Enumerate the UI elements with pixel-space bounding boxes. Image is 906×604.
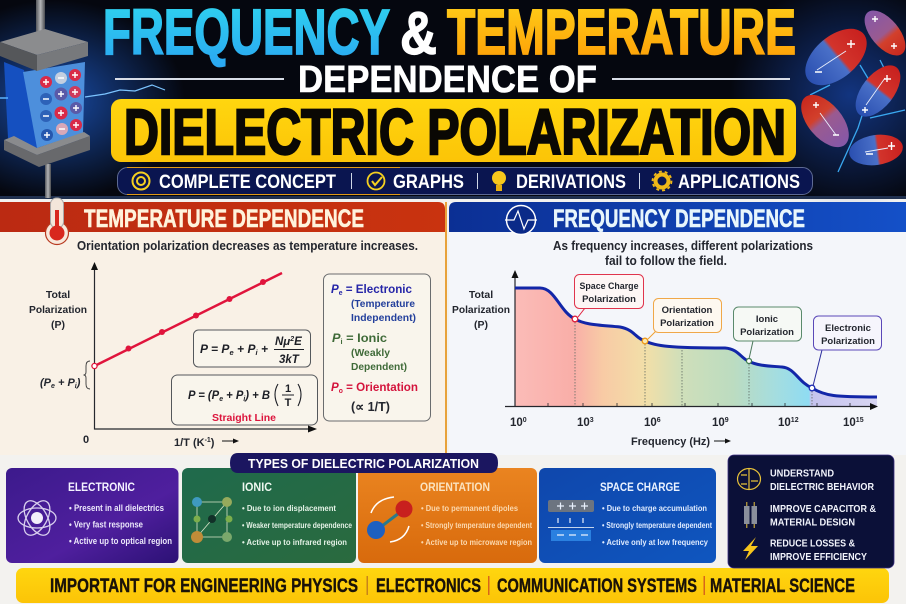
formula box: straight line form: 1	[285, 383, 291, 395]
chart: polarization versus 1/T: Total	[46, 289, 70, 301]
card: space charge: • Strongly temperature dependent	[602, 520, 712, 530]
card: electronic	[6, 468, 178, 563]
subtitle: dependence of: DEPENDENCE OF	[298, 59, 597, 101]
footer banner: COMMUNICATION SYSTEMS	[497, 575, 697, 597]
icon: capacitors	[744, 502, 757, 528]
chart: polarization versus frequency: Frequency (Hz)	[631, 436, 710, 448]
card: electronic: • Active up to optical region	[69, 536, 172, 546]
chart: polarization versus frequency: 10	[712, 417, 725, 429]
formula box: straight line form: P = (P	[188, 390, 220, 402]
footer banner: ELECTRONICS	[376, 575, 481, 597]
icon: lightning bolt	[743, 537, 758, 560]
callout: space charge polarization: Space Charge	[580, 281, 638, 292]
legend box: polarization terms: = Electronic	[343, 282, 412, 296]
feature navigation strip	[118, 168, 812, 194]
legend box: polarization terms: o	[339, 388, 343, 395]
chart: polarization versus frequency: (P)	[474, 319, 488, 331]
callout: space charge polarization: Polarization	[582, 294, 636, 305]
icon: thermometer	[46, 198, 68, 244]
icon: ionic lattice	[191, 497, 232, 543]
chart: polarization versus 1/T: i	[75, 383, 78, 390]
chart: polarization versus 1/T: 0	[83, 434, 89, 446]
formula box: orientation term: i	[255, 348, 258, 357]
panel: frequency dependence	[449, 202, 906, 455]
legend box: polarization terms: P	[331, 282, 340, 296]
chart: polarization versus frequency: 10	[778, 417, 791, 429]
card: space charge: • Active only at low frequency	[602, 537, 708, 547]
chart: polarization versus 1/T: e	[51, 383, 55, 390]
heading: types of dielectric polarization	[230, 453, 498, 473]
legend box: polarization terms: = Ionic	[343, 331, 387, 345]
card: ionic: IONIC	[242, 480, 272, 494]
callout: electronic polarization: Polarization	[821, 336, 875, 347]
formula box: straight line form: e	[219, 396, 223, 403]
chart: polarization versus 1/T: Polarization	[29, 304, 87, 316]
chart: polarization versus frequency	[452, 270, 878, 448]
callout: ionic polarization	[734, 307, 802, 359]
callout: orientation polarization: Orientation	[662, 305, 713, 316]
formula box: straight line form	[172, 375, 318, 425]
frequency panel description: As frequency increases, different polarizations	[553, 239, 813, 253]
card: orientation: • Strongly temperature dependent	[421, 520, 532, 530]
feature navigation strip: GRAPHS	[393, 172, 464, 193]
title: frequency and temperature: &	[400, 0, 437, 67]
chart: polarization versus frequency: Total	[469, 289, 493, 301]
formula box: orientation term: e	[229, 348, 234, 357]
panel: temperature dependence	[0, 198, 447, 455]
legend box: polarization terms: Dependent)	[351, 362, 407, 373]
footer banner	[16, 568, 889, 603]
icon: atom	[18, 497, 56, 539]
icon: charged plates	[548, 500, 594, 541]
panel: benefits: REDUCE LOSSES &	[770, 538, 855, 550]
panel: benefits: DIELECTRIC BEHAVIOR	[770, 481, 874, 493]
feature navigation strip: COMPLETE CONCEPT	[159, 172, 336, 193]
temperature panel heading: TEMPERATURE DEPENDENCE	[84, 205, 364, 233]
chart: polarization versus frequency: 10	[843, 417, 856, 429]
card: ionic: • Due to ion displacement	[242, 503, 336, 513]
card: orientation: • Active up to microwave region	[421, 537, 532, 547]
panel: benefits	[728, 455, 894, 568]
chart: polarization versus frequency: 10	[510, 417, 523, 429]
card: orientation: • Due to permanent dipoles	[421, 503, 518, 513]
chart: polarization versus 1/T: 1/T (K	[174, 437, 205, 449]
card: electronic: • Very fast response	[69, 520, 143, 530]
icon: brain	[738, 468, 760, 490]
panel: benefits: IMPROVE EFFICIENCY	[770, 551, 867, 563]
chart: polarization versus 1/T: )	[211, 437, 215, 449]
icon: rotating dipole	[367, 497, 412, 542]
callout: electronic polarization: Electronic	[825, 323, 871, 334]
feature navigation strip: APPLICATIONS	[678, 172, 800, 193]
formula box: orientation term	[194, 330, 310, 367]
card: space charge	[539, 468, 716, 563]
chart: polarization versus frequency: 15	[856, 417, 864, 424]
legend box: polarization terms: Independent)	[351, 313, 416, 324]
icon: capacitor with charges	[0, 0, 165, 198]
chart: polarization versus frequency: 9	[725, 417, 729, 424]
frequency panel description	[553, 239, 813, 268]
chart: polarization versus frequency: 12	[791, 417, 799, 424]
legend box: polarization terms: e	[339, 290, 343, 297]
formula box: orientation term: +	[258, 342, 268, 356]
chart: polarization versus frequency: 6	[657, 417, 661, 424]
formula box: orientation term: Nμ	[275, 336, 290, 348]
icon: dipole molecules	[792, 3, 906, 172]
panel: benefits: UNDERSTAND	[770, 468, 834, 480]
formula box: straight line form: i	[243, 396, 246, 403]
card: ionic: • Active up to infrared region	[242, 537, 347, 547]
legend box: polarization terms: (∝ 1/T)	[351, 400, 390, 414]
callout: orientation polarization	[648, 298, 722, 339]
formula box: straight line form: ) + B	[243, 390, 270, 402]
chart: polarization versus frequency: 10	[577, 417, 590, 429]
icon: waveform circle	[505, 206, 537, 234]
legend box: polarization terms: i	[341, 339, 343, 346]
chart: polarization versus 1/T: (P)	[51, 319, 65, 331]
chart: polarization versus 1/T	[29, 262, 317, 449]
panel: benefits: IMPROVE CAPACITOR &	[770, 503, 876, 515]
legend box: polarization terms: P	[332, 331, 342, 345]
chart: polarization versus 1/T: + P	[55, 377, 75, 389]
formula box: straight line form: + P	[223, 390, 244, 402]
formula box: orientation term: 3kT	[279, 354, 300, 366]
legend box: polarization terms: = Orientation	[343, 380, 418, 394]
card: space charge: • Due to charge accumulation	[602, 503, 707, 513]
card: electronic: • Present in all dielectrics	[69, 503, 164, 513]
frequency panel heading: FREQUENCY DEPENDENCE	[553, 205, 805, 233]
frequency panel heading	[449, 202, 906, 233]
formula box: orientation term: P = P	[200, 342, 229, 356]
panel: benefits: MATERIAL DESIGN	[770, 516, 855, 528]
legend box: polarization terms	[324, 274, 430, 421]
callout: ionic polarization: Polarization	[740, 327, 794, 338]
formula box: orientation term: 2	[289, 336, 294, 343]
callout: orientation polarization: Polarization	[660, 318, 714, 329]
callout: electronic polarization	[813, 316, 882, 386]
formula box: straight line form: T	[285, 397, 292, 409]
title: frequency and temperature	[103, 0, 796, 68]
chart: polarization versus 1/T: (P	[40, 377, 51, 389]
legend box: polarization terms: (Weakly	[351, 348, 390, 359]
chart: polarization versus 1/T: -1	[205, 437, 211, 444]
card: electronic: ELECTRONIC	[68, 480, 135, 494]
card: orientation	[358, 468, 537, 563]
footer banner: IMPORTANT FOR ENGINEERING PHYSICS	[50, 575, 358, 597]
chart: polarization versus frequency: 0	[523, 417, 527, 424]
legend box: polarization terms: P	[331, 380, 340, 394]
feature navigation strip: DERIVATIONS	[516, 172, 626, 193]
card: ionic	[182, 468, 356, 563]
callout: space charge polarization	[574, 274, 644, 317]
card: orientation: ORIENTATION	[420, 480, 490, 494]
frequency panel description: fail to follow the field.	[605, 254, 727, 268]
heading: types of dielectric polarization: TYPES OF DIELECTRIC POLARIZATION	[248, 456, 479, 471]
formula box: orientation term: + P	[234, 342, 256, 356]
footer banner: MATERIAL SCIENCE	[710, 575, 855, 597]
card: ionic: • Weaker temperature dependence	[242, 520, 352, 530]
temperature panel description: Orientation polarization decreases as temperature increases.	[77, 239, 418, 253]
formula box: orientation term: E	[294, 336, 302, 348]
chart: polarization versus frequency: Polarization	[452, 304, 510, 316]
formula box: straight line form: Straight Line	[212, 412, 276, 424]
legend box: polarization terms: (Temperature	[351, 299, 415, 310]
chart: polarization versus frequency: 10	[644, 417, 657, 429]
header banner	[0, 0, 906, 210]
chart: polarization versus 1/T: )	[76, 377, 81, 389]
callout: ionic polarization: Ionic	[756, 314, 778, 325]
chart: polarization versus frequency: 3	[590, 417, 594, 424]
card: space charge: SPACE CHARGE	[600, 480, 680, 494]
